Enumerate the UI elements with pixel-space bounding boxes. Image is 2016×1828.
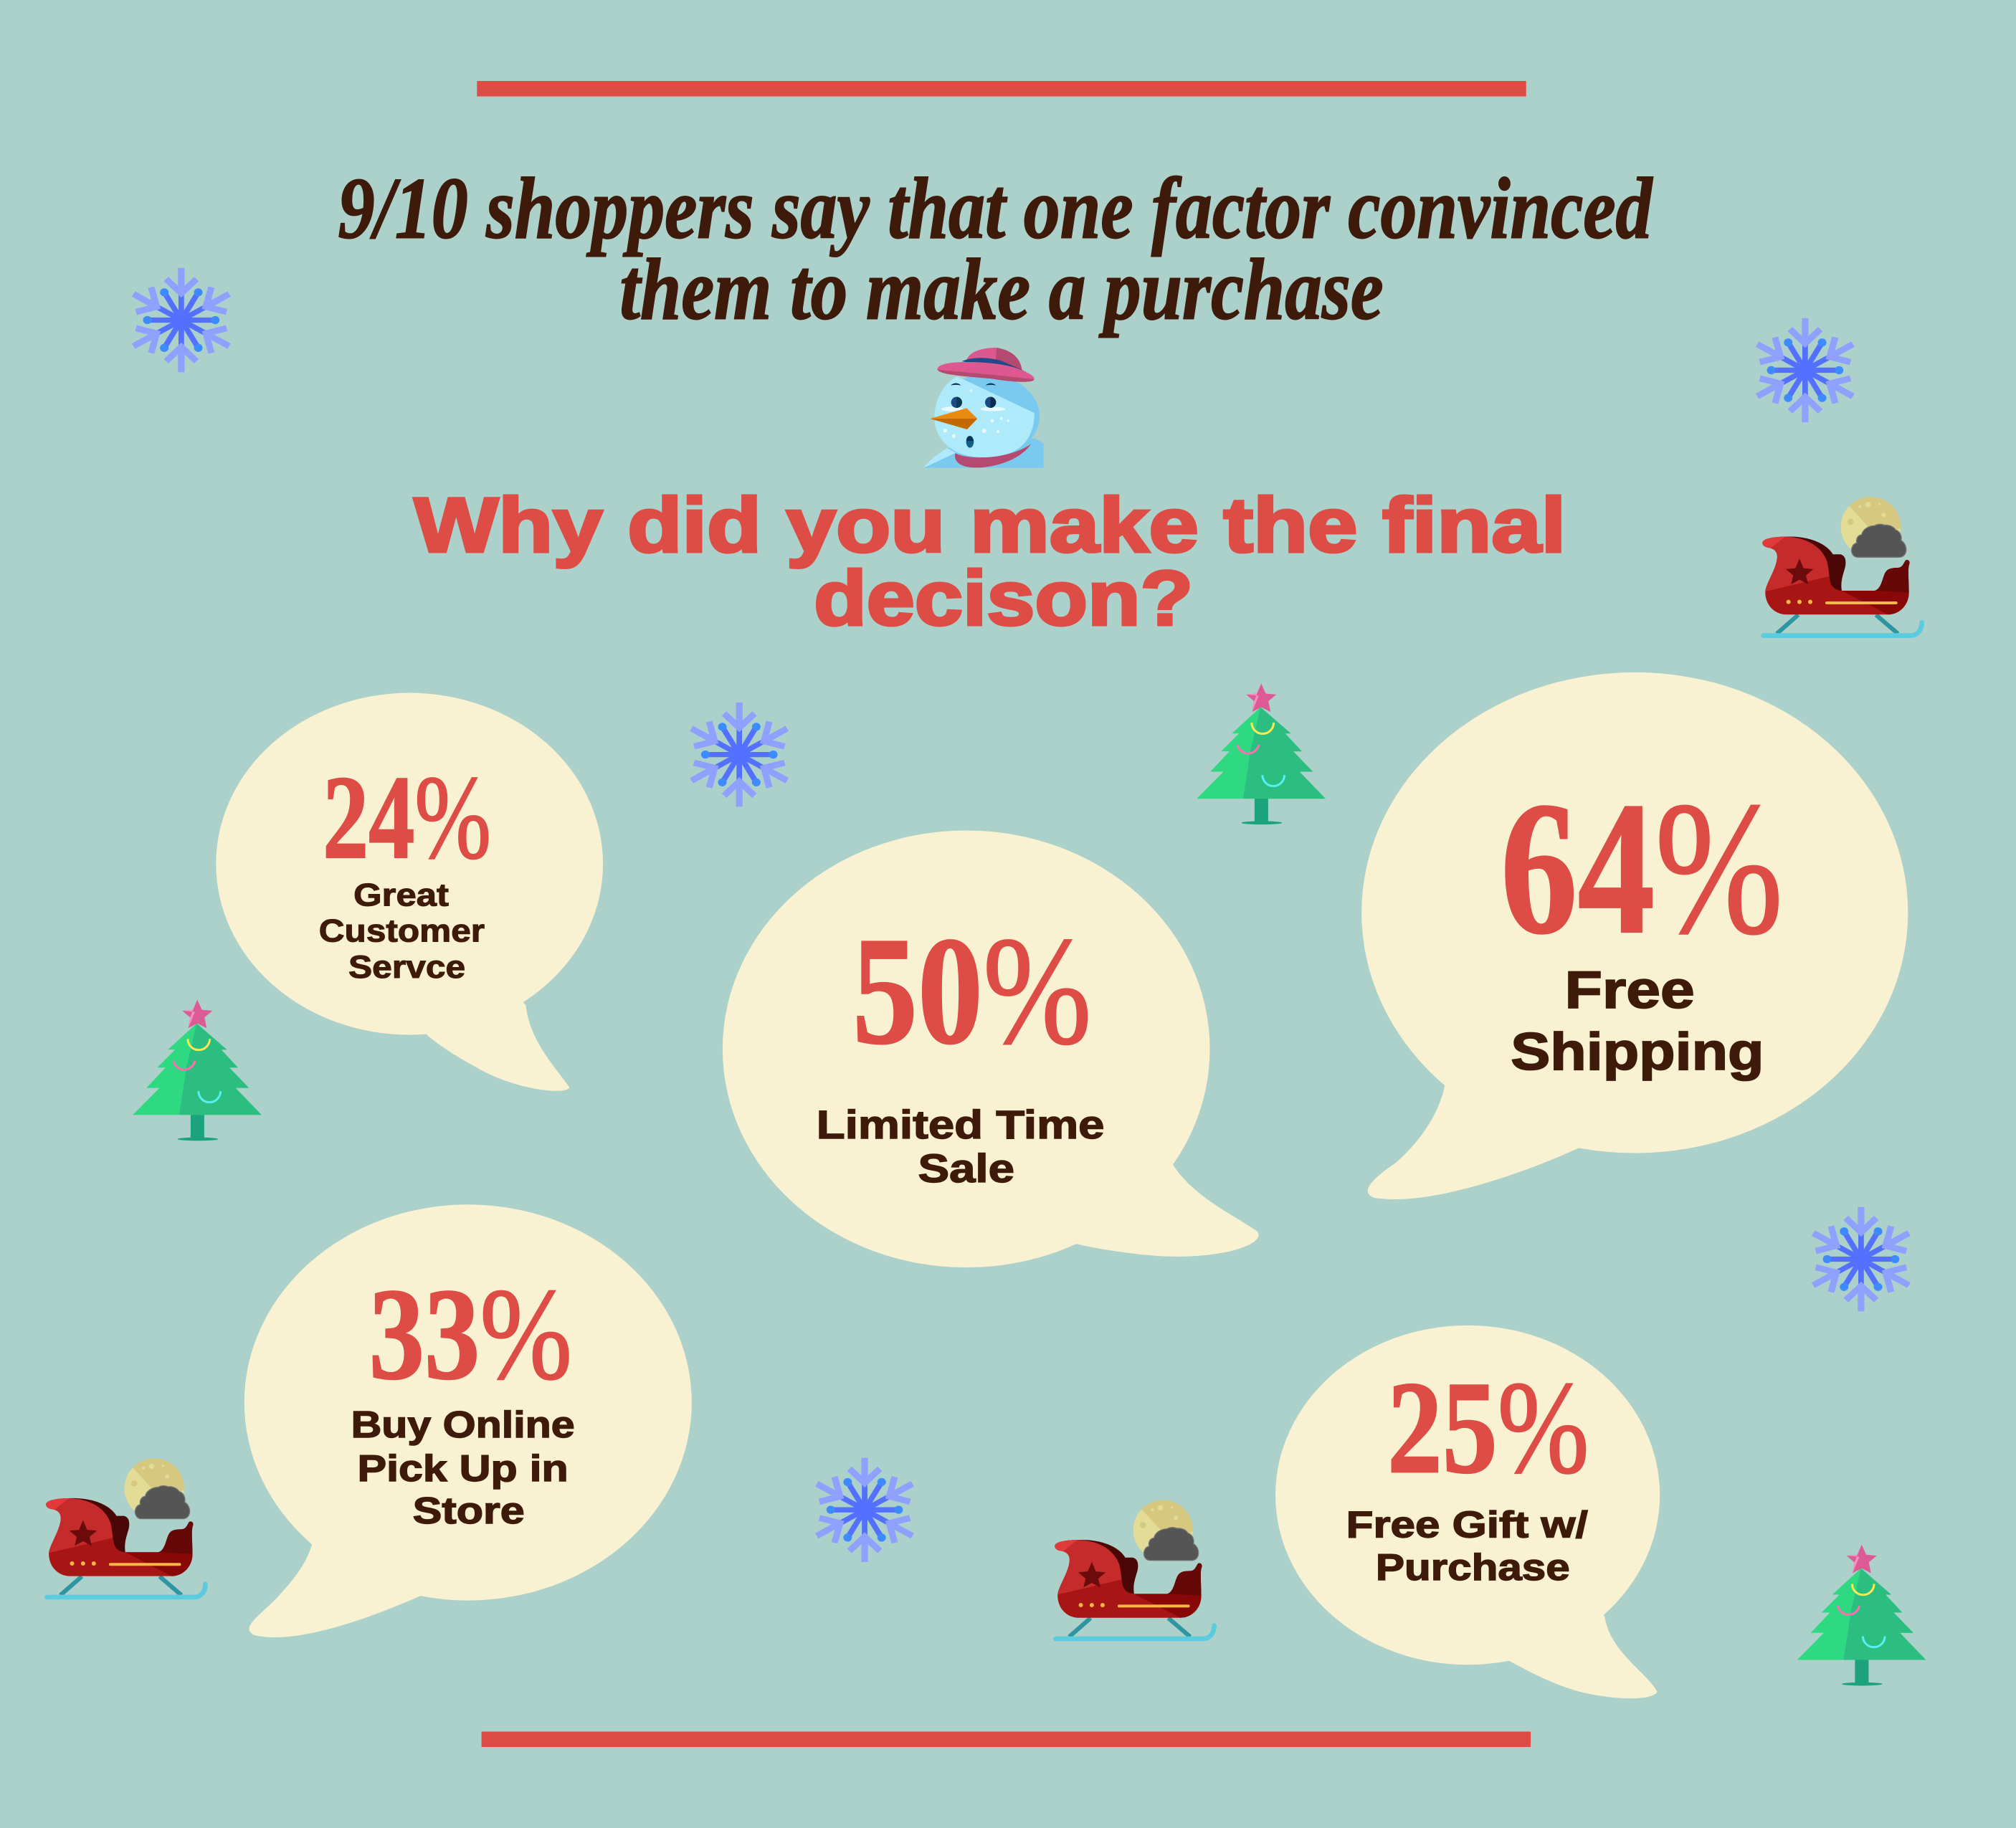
panel: 50% limited time sale: Sale — [918, 1146, 1014, 1191]
panel: 24% great customer service: Customer — [319, 913, 485, 949]
top bar — [477, 81, 1526, 96]
title: them to make a purchase — [619, 242, 1384, 338]
title: 9/10 shoppers say that one factor convinced — [338, 161, 1653, 257]
panel: 33% buy online pick up in store: Store — [413, 1490, 525, 1532]
panel: 25% free gift with purchase: 25% — [1387, 1353, 1589, 1500]
panel: 24% great customer service: 24% — [323, 751, 491, 884]
panel: 64% free shipping — [1361, 672, 1908, 1199]
bottom bar — [482, 1732, 1531, 1747]
icon: tree top centre — [1197, 684, 1326, 824]
panel: 24% great customer service: Great — [353, 876, 449, 913]
panel: 33% buy online pick up in store — [244, 1204, 692, 1637]
panel: 64% free shipping: 64% — [1501, 763, 1783, 973]
panel: 24% great customer service: Servce — [348, 948, 465, 985]
panel: 33% buy online pick up in store: Pick Up in — [358, 1448, 569, 1490]
heading: decison? — [814, 556, 1193, 642]
panel: 50% limited time sale: Limited Time — [817, 1103, 1105, 1147]
panel: 50% limited time sale: 50% — [852, 905, 1092, 1076]
panel: 25% free gift with purchase: Purchase — [1376, 1547, 1570, 1589]
icon: sleigh bottom centre — [1055, 1500, 1214, 1639]
panel: 24% great customer service — [216, 693, 603, 1091]
panel: 50% limited time sale — [723, 830, 1259, 1267]
snowflake 3 — [684, 703, 794, 806]
icon: tree left — [133, 1000, 262, 1141]
panel: 33% buy online pick up in store: 33% — [369, 1261, 572, 1406]
snowflake 5 — [809, 1457, 920, 1562]
panel: 25% free gift with purchase — [1275, 1325, 1660, 1698]
title — [338, 161, 1653, 338]
icon: snowman — [923, 348, 1044, 468]
panel: 64% free shipping: Shipping — [1511, 1022, 1764, 1081]
icon: sleigh top right — [1762, 497, 1922, 636]
snowflake 4 — [1806, 1207, 1916, 1311]
heading — [414, 482, 1566, 642]
heading: Why did you make the final — [414, 482, 1566, 568]
icon: sleigh bottom left — [46, 1459, 205, 1597]
snowflake 2 — [1750, 318, 1860, 422]
snowflake 1 — [126, 268, 237, 372]
icon: tree bottom right — [1797, 1545, 1926, 1685]
panel: 64% free shipping: Free — [1565, 960, 1695, 1019]
panel: 25% free gift with purchase: Free Gift w/ — [1346, 1505, 1588, 1546]
panel: 33% buy online pick up in store: Buy Online — [351, 1404, 575, 1446]
